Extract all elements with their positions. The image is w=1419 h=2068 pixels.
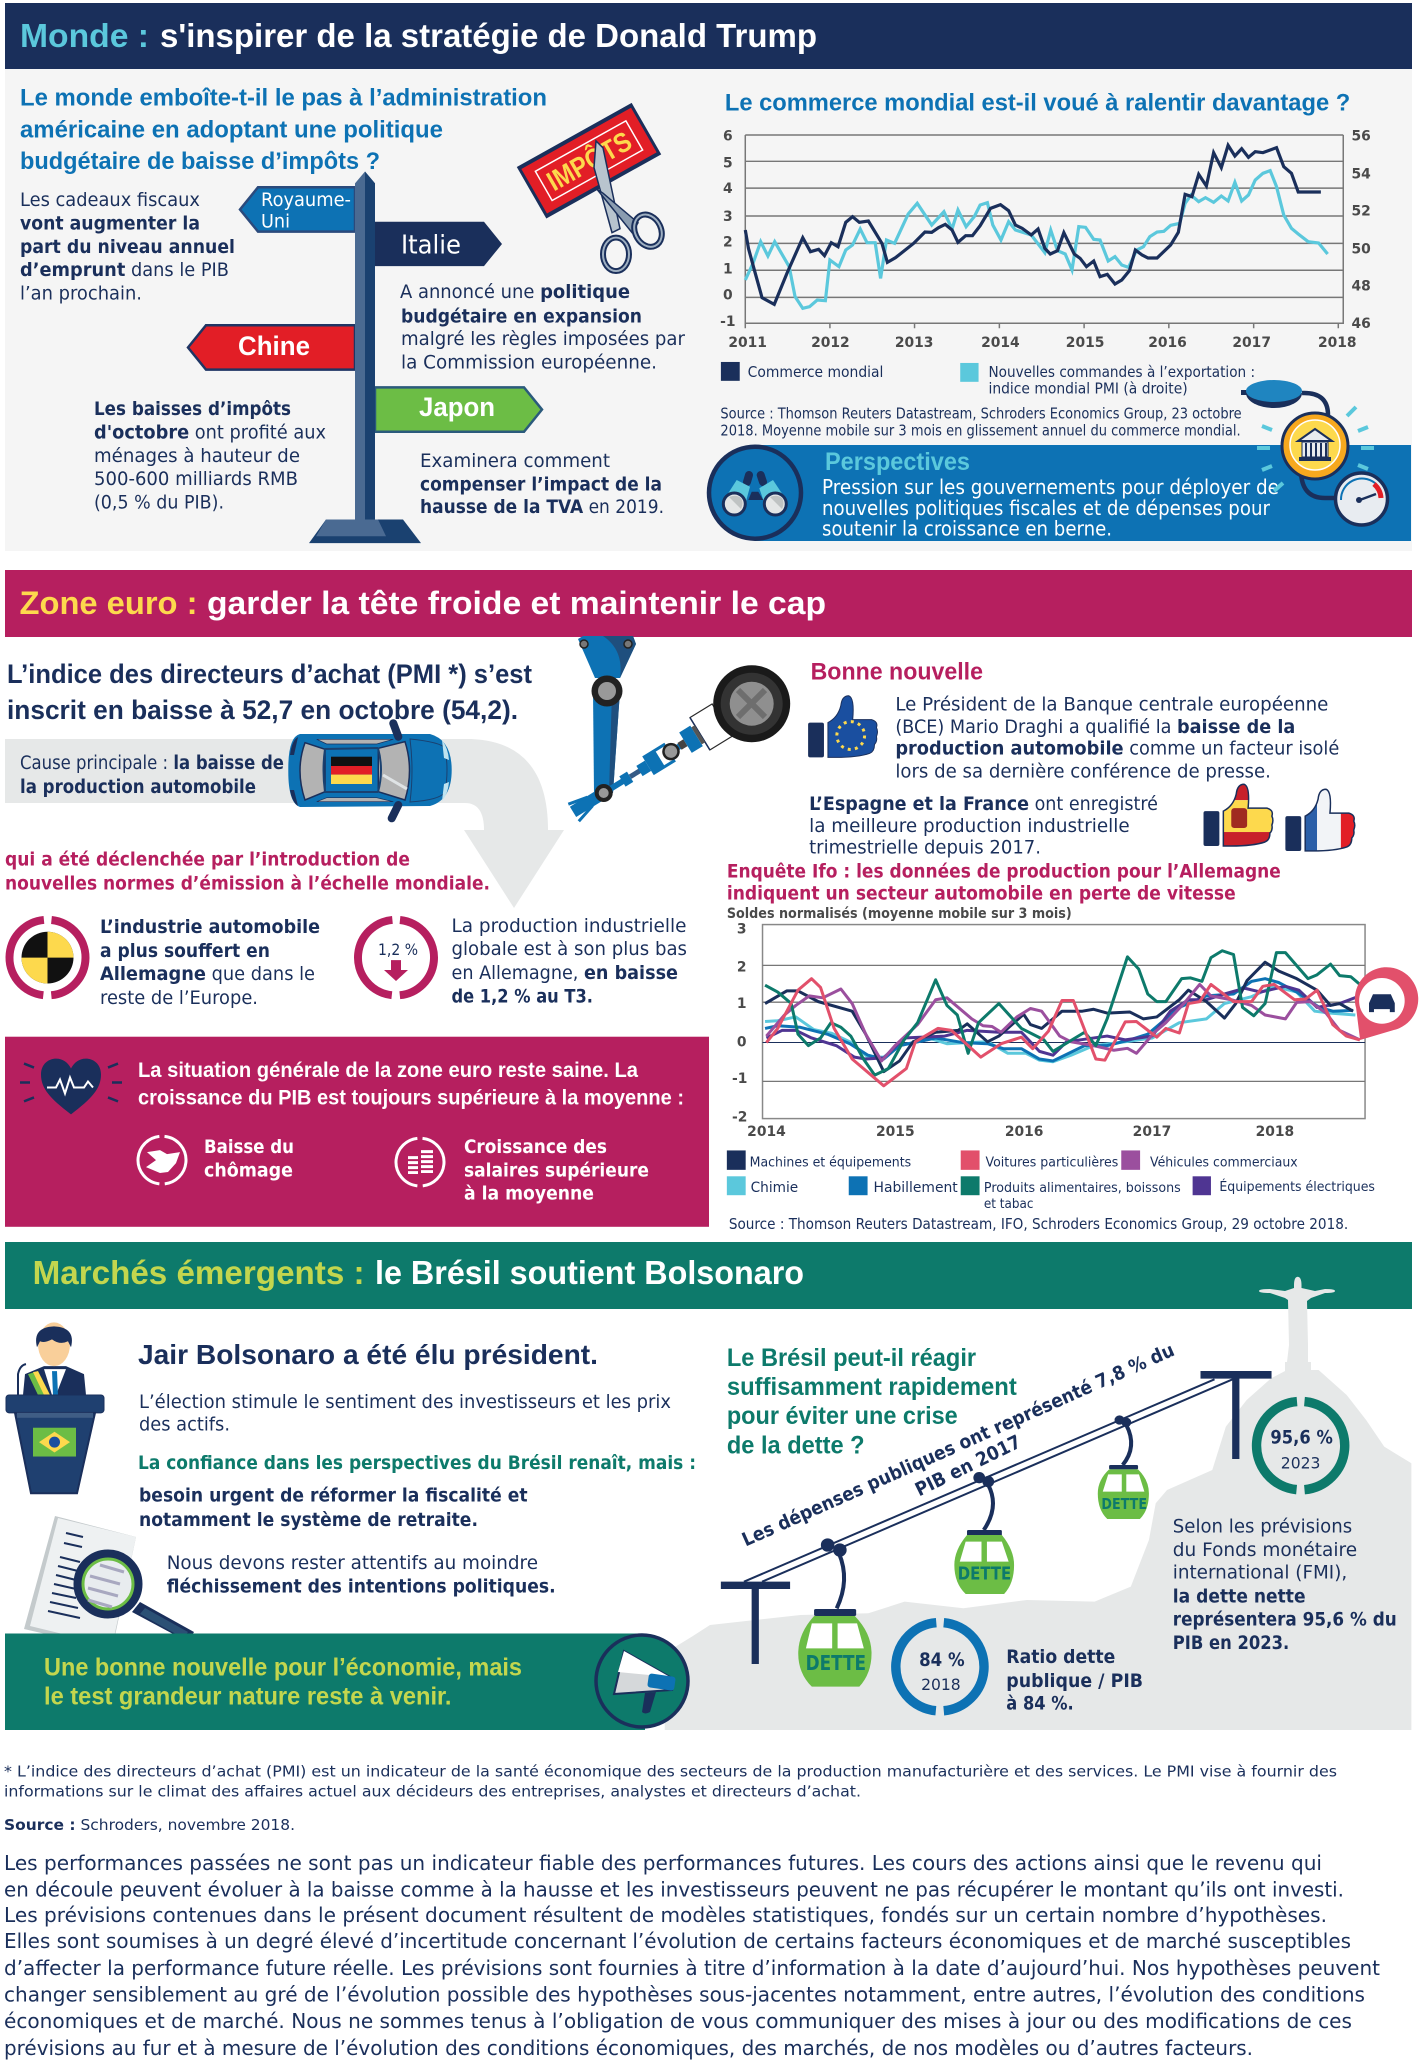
legend: commerce mondial: Commerce mondial bbox=[748, 363, 883, 381]
heading: Jair Bolsonaro: Jair Bolsonaro a été élu président. bbox=[138, 1339, 598, 1370]
heading: enquête Ifo: indiquent un secteur automobile en perte de vitesse bbox=[727, 883, 1236, 905]
legend: enquête Ifo: Véhicules commerciaux bbox=[1150, 1155, 1298, 1170]
source: enquête Ifo: Source : Thomson Reuters Datastream, IFO, Schroders Economics Group, 29 octobre 2018. bbox=[729, 1215, 1348, 1233]
chart: commerce mondial: 0 bbox=[723, 287, 733, 303]
signpost pole bbox=[309, 172, 421, 543]
text: production industrielle: globale est à son plus bas bbox=[452, 939, 687, 960]
panel: perspectives: soutenir la croissance en berne. bbox=[822, 516, 1112, 540]
text: Japon: compenser l’impact de la bbox=[420, 475, 662, 495]
heading: baisse d'impôts: budgétaire de baisse d’impôts ? bbox=[20, 148, 380, 175]
heading: PMI bbox=[7, 659, 532, 725]
chart: commerce mondial: 48 bbox=[1351, 278, 1371, 294]
text: ratio dette bbox=[1006, 1647, 1143, 1714]
heading: Brésil dette: suffisamment rapidement bbox=[727, 1374, 1017, 1401]
text: réformes bbox=[139, 1486, 528, 1531]
montagne bbox=[665, 1370, 1411, 1730]
text: prévisions FMI: international (FMI), bbox=[1173, 1563, 1347, 1584]
chart: commerce mondial: 2011 bbox=[728, 335, 767, 351]
text: Draghi: production automobile comme un facteur isolé bbox=[895, 738, 1339, 759]
chart: commerce mondial bbox=[720, 128, 1371, 351]
heading: enquête Ifo bbox=[727, 860, 1281, 905]
legend: enquête Ifo: Chimie bbox=[751, 1180, 798, 1196]
text: Draghi: Le Président de la Banque centrale européenne bbox=[895, 695, 1328, 716]
text: croissance des salaires: à la moyenne bbox=[464, 1184, 594, 1205]
chart: commerce mondial: 2018 bbox=[1318, 335, 1357, 351]
section header: zone euro: garder la tête froide et maintenir le cap bbox=[207, 585, 826, 621]
signpost arrow: Japon: Japon bbox=[419, 392, 495, 422]
section header: marchés émergents: Marchés émergents : bbox=[33, 1254, 365, 1291]
text: Chine: (0,5 % du PIB). bbox=[94, 493, 224, 514]
heading: PMI: inscrit en baisse à 52,7 en octobre (54,2). bbox=[7, 695, 518, 725]
chart: commerce mondial: 50 bbox=[1351, 241, 1371, 257]
text: prévisions FMI: représentera 95,6 % du bbox=[1173, 1609, 1397, 1630]
chart: enquête Ifo: 2015 bbox=[876, 1124, 915, 1140]
icon: barres salaires bbox=[394, 1136, 446, 1188]
text: production industrielle: en Allemagne, en baisse bbox=[452, 963, 678, 984]
ring: 95,6 % 2023: 2023 bbox=[1281, 1453, 1320, 1472]
chart: enquête Ifo: 3 bbox=[737, 922, 747, 938]
chart: commerce mondial: 52 bbox=[1351, 204, 1371, 220]
label: DETTE petite: DETTE bbox=[1101, 1495, 1147, 1513]
text: croissance des salaires: salaires supérieure bbox=[464, 1161, 649, 1182]
icon: coeur bbox=[20, 1059, 122, 1114]
chart: commerce mondial: 6 bbox=[723, 128, 733, 144]
chart: commerce mondial: 1 bbox=[723, 262, 733, 278]
cabine: dette, grande bbox=[798, 1538, 872, 1687]
chart: enquête Ifo bbox=[732, 922, 1365, 1140]
chart: commerce mondial: 54 bbox=[1351, 167, 1371, 183]
text: Chine: d'octobre ont profité aux bbox=[94, 423, 326, 444]
text: Royaume-Uni: part du niveau annuel bbox=[20, 237, 235, 258]
text: industrie automobile bbox=[100, 917, 320, 1009]
text: Espagne et France: L’Espagne et la France ont enregistré bbox=[809, 794, 1158, 815]
chart: commerce mondial: 46 bbox=[1351, 316, 1371, 332]
text: dépenses publiques (oblique): Les dépenses publiques ont représenté 7,8 % du bbox=[739, 1340, 1178, 1551]
text: industrie automobile: L’industrie automobile bbox=[100, 917, 320, 938]
chart: commerce mondial: 3 bbox=[723, 209, 733, 225]
text: Chine bbox=[94, 399, 326, 514]
text: vigilance: Nous devons rester attentifs au moindre bbox=[167, 1553, 538, 1574]
chart: enquête Ifo: 2016 bbox=[1005, 1124, 1043, 1140]
footnote: PMI: * L’indice des directeurs d’achat (PMI) est un indicateur de la santé économique des secteurs de la production manufacturière et des services. Le PMI vise à fournir des bbox=[4, 1763, 1337, 1781]
text: Italie bbox=[400, 282, 685, 374]
chart: commerce mondial: -1 bbox=[720, 314, 736, 330]
source: générale: Source : Schroders, novembre 2018. bbox=[4, 1816, 295, 1834]
text: situation saine: La situation générale de la zone euro reste saine. La bbox=[138, 1059, 638, 1082]
text: baisse du chômage: chômage bbox=[204, 1161, 293, 1182]
text: cause principale bbox=[20, 753, 284, 798]
ring: 84 % 2018: 2018 bbox=[921, 1675, 961, 1694]
text: Italie: budgétaire en expansion bbox=[401, 306, 642, 327]
icon: pouce France bbox=[1285, 789, 1357, 852]
disclaimer: changer sensiblement au gré de l’évolution possible des hypothèses sous-jacentes notamment, entre autres, l’évolution des conditions bbox=[4, 1983, 1365, 2007]
heading: Brésil dette: Le Brésil peut-il réagir bbox=[727, 1345, 976, 1372]
panel: bonne nouvelle pour l'économie bbox=[5, 1634, 645, 1730]
heading: Brésil dette bbox=[727, 1345, 1017, 1460]
signpost arrow: Italie: Italie bbox=[401, 230, 461, 260]
text: Chine: ménages à hauteur de bbox=[94, 446, 300, 467]
legend: enquête Ifo: Habillement bbox=[874, 1180, 958, 1196]
text: Draghi: lors de sa dernière conférence de presse. bbox=[895, 761, 1271, 782]
icon: repère voiture bbox=[1355, 967, 1418, 1040]
text: prévisions FMI bbox=[1173, 1517, 1397, 1654]
chart: commerce mondial: 2016 bbox=[1148, 335, 1187, 351]
signpost arrow: Italie bbox=[375, 222, 502, 266]
icon: bras robotisé et pneu bbox=[563, 636, 790, 828]
icon: pompe, pièce et manomètre bbox=[1241, 380, 1388, 525]
heading: bonne nouvelle: Bonne nouvelle bbox=[811, 658, 983, 685]
legend: commerce mondial: Nouvelles commandes à l’exportation : bbox=[988, 363, 1255, 381]
heading: baisse d'impôts: américaine en adoptant une politique bbox=[20, 117, 443, 143]
text: Royaume-Uni bbox=[20, 190, 235, 305]
ring: 95,6 % 2023 bbox=[1253, 1398, 1348, 1493]
section header: monde: Monde : bbox=[20, 17, 149, 54]
legend: commerce mondial: indice mondial PMI (à droite) bbox=[988, 380, 1188, 398]
panel: perspectives: Pression sur les gouvernements pour déployer de bbox=[822, 475, 1279, 499]
disclaimer: Les performances passées ne sont pas un indicateur fiable des performances futures. Les cours des actions ainsi que le revenu qui bbox=[4, 1851, 1322, 1875]
heading: Brésil dette: pour éviter une crise bbox=[727, 1403, 958, 1430]
signpost arrow: Chine bbox=[188, 325, 355, 370]
text: dépenses publiques (oblique): PIB en 2017 bbox=[912, 1432, 1025, 1501]
text: réformes: notamment le système de retraite. bbox=[139, 1510, 478, 1531]
téléphérique: câbles et pylônes bbox=[721, 1371, 1272, 1664]
icon: pouce Espagne bbox=[1204, 784, 1275, 847]
text: Draghi: (BCE) Mario Draghi a qualifié la baisse de la bbox=[895, 717, 1295, 738]
chart: enquête Ifo: -1 bbox=[732, 1071, 747, 1087]
text: production industrielle: de 1,2 % au T3. bbox=[452, 986, 593, 1007]
footnote: PMI: informations sur le climat des affaires actuel aux décideurs des entreprises, analystes et directeurs d’achat. bbox=[4, 1783, 861, 1801]
text: Draghi bbox=[895, 695, 1339, 782]
icon: ticket impôts et ciseaux: IMPÔTS bbox=[541, 124, 637, 197]
disclaimer: Elles sont soumises à un degré élevé d’incertitude concernant l’évolution de certains facteurs économiques et de marché susceptibles bbox=[4, 1929, 1351, 1953]
panel: situation générale bbox=[5, 1037, 709, 1227]
Christ Rédempteur bbox=[1259, 1277, 1335, 1372]
text: ratio dette: publique / PIB bbox=[1006, 1671, 1143, 1692]
chart: enquête Ifo: 2018 bbox=[1256, 1124, 1294, 1140]
source: commerce mondial: 2018. Moyenne mobile sur 3 mois en glissement annuel du commerce mondial. bbox=[720, 421, 1241, 439]
text: Royaume-Uni: l’an prochain. bbox=[20, 284, 142, 305]
label: DETTE grande: DETTE bbox=[806, 1651, 866, 1675]
heading: commerce mondial: Le commerce mondial est-il voué à ralentir davantage ? bbox=[725, 90, 1350, 117]
signpost arrow: Chine: Chine bbox=[238, 331, 310, 361]
disclaimer: en découle peuvent évoluer à la baisse comme à la hausse et les investisseurs peuvent ne pas récupérer le montant qu’ils ont investi. bbox=[4, 1878, 1344, 1902]
icon: président au pupitre bbox=[6, 1322, 104, 1493]
text: confiance: La confiance dans les perspectives du Brésil renaît, mais : bbox=[138, 1453, 696, 1474]
disclaimer: prévisions au fur et à mesure de l’évolution des conditions économiques, des marchés, de nos modèles ou d’autres facteurs. bbox=[4, 2036, 1253, 2060]
text: Royaume-Uni: vont augmenter la bbox=[20, 213, 200, 234]
chart: enquête Ifo: 2 bbox=[737, 959, 747, 975]
disclaimer: d’affecter la performance future réelle. Les prévisions sont fournies à titre d’information à la date d’aujourd’hui. Nos hypothèses peuvent bbox=[4, 1956, 1380, 1980]
chart: commerce mondial: 2012 bbox=[811, 335, 850, 351]
text: industrie automobile: Allemagne que dans le bbox=[100, 964, 315, 985]
icon: voiture allemande bbox=[288, 723, 452, 818]
text: normes d'émission bbox=[5, 850, 490, 894]
text: prévisions FMI: PIB en 2023. bbox=[1173, 1633, 1289, 1654]
text: normes d'émission: qui a été déclenchée par l’introduction de bbox=[5, 850, 410, 871]
legend: commerce mondial bbox=[721, 362, 1255, 398]
panel: bonne nouvelle pour l'économie: le test grandeur nature reste à venir. bbox=[44, 1682, 452, 1710]
heading: Brésil dette: de la dette ? bbox=[727, 1433, 865, 1460]
text: élection: des actifs. bbox=[139, 1415, 230, 1436]
text: croissance des salaires bbox=[464, 1137, 649, 1205]
text: élection bbox=[139, 1392, 671, 1436]
ring: 95,6 % 2023: 95,6 % bbox=[1270, 1428, 1333, 1449]
text: cause principale: Cause principale : la baisse de bbox=[20, 753, 284, 774]
legend: enquête Ifo: et tabac bbox=[984, 1197, 1033, 1212]
label: DETTE moyenne: DETTE bbox=[958, 1564, 1011, 1585]
chart: enquête Ifo: 0 bbox=[737, 1034, 747, 1050]
text: production industrielle: La production industrielle bbox=[452, 916, 686, 937]
text: Japon bbox=[420, 451, 664, 518]
section header: marchés émergents bbox=[5, 1242, 1412, 1309]
text: prévisions FMI: Selon les prévisions bbox=[1173, 1517, 1352, 1538]
disclaimer: Les prévisions contenues dans le présent document résultent de modèles statistiques, fondés sur un certain nombre d’hypothèses. bbox=[4, 1903, 1327, 1927]
panel: perspectives: nouvelles politiques fiscales et de dépenses pour bbox=[822, 496, 1271, 520]
chart: commerce mondial: 2015 bbox=[1066, 335, 1104, 351]
legend: enquête Ifo: Voitures particulières bbox=[985, 1155, 1119, 1170]
signpost arrow: Royaume-Uni: Uni bbox=[261, 212, 290, 233]
text: Italie: A annoncé une politique bbox=[400, 282, 630, 303]
legend: enquête Ifo: Produits alimentaires, boissons bbox=[984, 1181, 1181, 1196]
text: situation saine: croissance du PIB est toujours supérieure à la moyenne : bbox=[138, 1086, 684, 1109]
section panel: monde bbox=[5, 69, 1412, 551]
icon: poignée de main bbox=[136, 1134, 188, 1186]
chart: enquête Ifo: 2014 bbox=[747, 1124, 786, 1140]
text: Japon: Examinera comment bbox=[420, 451, 610, 472]
text: Espagne et France bbox=[809, 794, 1158, 859]
text: croissance des salaires: Croissance des bbox=[464, 1137, 607, 1158]
text: baisse du chômage bbox=[204, 1137, 294, 1182]
arrow: cause vers conséquence bbox=[5, 739, 564, 908]
legend: enquête Ifo: Équipements électriques bbox=[1219, 1179, 1375, 1195]
icon: baisse de 1,2 %: 1,2 % bbox=[378, 940, 418, 959]
chart: commerce mondial: 56 bbox=[1351, 128, 1371, 144]
chart: enquête Ifo: 1 bbox=[737, 996, 747, 1012]
text: industrie automobile: a plus souffert en bbox=[100, 941, 270, 962]
section header: zone euro: Zone euro : bbox=[20, 585, 198, 621]
text: Italie: la Commission européenne. bbox=[401, 353, 657, 374]
icon: baisse de 1,2 % bbox=[354, 916, 438, 999]
chart: commerce mondial: 2017 bbox=[1232, 335, 1271, 351]
text: Chine: 500-600 milliards RMB bbox=[94, 469, 298, 490]
text: prévisions FMI: du Fonds monétaire bbox=[1173, 1540, 1357, 1561]
legend: enquête Ifo: Machines et équipements bbox=[750, 1155, 911, 1170]
icon: mégaphone bbox=[596, 1635, 688, 1727]
heading: baisse d'impôts: Le monde emboîte-t-il le pas à l’administration bbox=[20, 85, 547, 111]
panel: perspectives bbox=[755, 445, 1411, 541]
icon: pouce UE bbox=[808, 696, 877, 757]
icon: cible crash test bbox=[6, 916, 89, 999]
text: ratio dette: Ratio dette bbox=[1006, 1647, 1115, 1668]
text: Italie: malgré les règles imposées par bbox=[401, 329, 685, 350]
icon: jumelles bbox=[709, 447, 801, 539]
text: Espagne et France: trimestrielle depuis 2017. bbox=[809, 837, 1041, 859]
section header: monde: s'inspirer de la stratégie de Donald Trump bbox=[160, 17, 817, 54]
section header: marchés émergents: le Brésil soutient Bolsonaro bbox=[375, 1254, 804, 1291]
text: Chine: Les baisses d’impôts bbox=[94, 399, 291, 420]
heading: baisse d'impôts bbox=[20, 85, 547, 175]
text: prévisions FMI: la dette nette bbox=[1173, 1587, 1306, 1608]
ring: 84 % 2018 bbox=[892, 1619, 988, 1715]
heading: PMI: L’indice des directeurs d’achat (PMI *) s’est bbox=[7, 659, 532, 689]
chart: commerce mondial: 2014 bbox=[981, 335, 1020, 351]
text: industrie automobile: reste de l’Europe. bbox=[100, 988, 258, 1009]
legend: enquête Ifo bbox=[727, 1150, 1375, 1212]
text: Royaume-Uni: Les cadeaux fiscaux bbox=[20, 190, 200, 211]
panel: bonne nouvelle pour l'économie: Une bonne nouvelle pour l’économie, mais bbox=[44, 1653, 522, 1681]
disclaimer bbox=[4, 1851, 1380, 2060]
text: production industrielle bbox=[452, 916, 687, 1007]
disclaimer: économiques et de marché. Nous ne sommes tenus à l’obligation de vous communiquer des mises à jour ou des modifications de ces bbox=[4, 2009, 1352, 2033]
footnote: PMI bbox=[4, 1763, 1337, 1801]
chart: enquête Ifo: 2017 bbox=[1133, 1124, 1171, 1140]
section header: monde bbox=[5, 3, 1412, 69]
cabine: dette, moyenne bbox=[954, 1472, 1014, 1594]
chart: commerce mondial: 2013 bbox=[895, 335, 933, 351]
source: commerce mondial bbox=[720, 405, 1242, 439]
chart: enquête Ifo: -2 bbox=[732, 1110, 747, 1126]
text: Espagne et France: la meilleure production industrielle bbox=[809, 816, 1130, 837]
text: Japon: hausse de la TVA en 2019. bbox=[420, 497, 664, 518]
ring: 84 % 2018: 84 % bbox=[919, 1650, 965, 1671]
signpost arrow: Japon bbox=[375, 387, 542, 432]
icon: ticket impôts et ciseaux bbox=[517, 103, 667, 271]
text: Royaume-Uni: d’emprunt dans le PIB bbox=[20, 260, 229, 281]
text: cause principale: la production automobile bbox=[20, 777, 256, 798]
panel: perspectives: Perspectives bbox=[825, 448, 970, 476]
text: ratio dette: à 84 %. bbox=[1006, 1693, 1074, 1714]
text: réformes: besoin urgent de réformer la fiscalité et bbox=[139, 1486, 528, 1507]
text: vigilance: fléchissement des intentions politiques. bbox=[167, 1577, 556, 1598]
chart: commerce mondial: 2 bbox=[723, 235, 733, 251]
chart: commerce mondial: 5 bbox=[723, 155, 733, 171]
heading: enquête Ifo: Enquête Ifo : les données de production pour l’Allemagne bbox=[727, 860, 1281, 882]
text: élection: L’élection stimule le sentiment des investisseurs et les prix bbox=[139, 1392, 671, 1413]
source: commerce mondial: Source : Thomson Reuters Datastream, Schroders Economics Group, 23 octobre bbox=[720, 405, 1242, 423]
text: baisse du chômage: Baisse du bbox=[204, 1137, 294, 1158]
text: situation saine bbox=[138, 1059, 684, 1109]
cabine: dette, petite bbox=[1098, 1415, 1149, 1519]
text: vigilance bbox=[167, 1553, 556, 1598]
signpost arrow: Royaume-Uni: Royaume- bbox=[261, 190, 351, 211]
chart subtitle: Soldes normalisés (moyenne mobile sur 3 mois) bbox=[727, 906, 1072, 922]
text: normes d'émission: nouvelles normes d’émission à l’échelle mondiale. bbox=[5, 873, 490, 894]
section header: zone euro bbox=[5, 570, 1412, 637]
chart: commerce mondial: 4 bbox=[723, 181, 733, 197]
icon: document et loupe bbox=[24, 1516, 194, 1650]
signpost arrow: Royaume-Uni bbox=[240, 187, 355, 233]
